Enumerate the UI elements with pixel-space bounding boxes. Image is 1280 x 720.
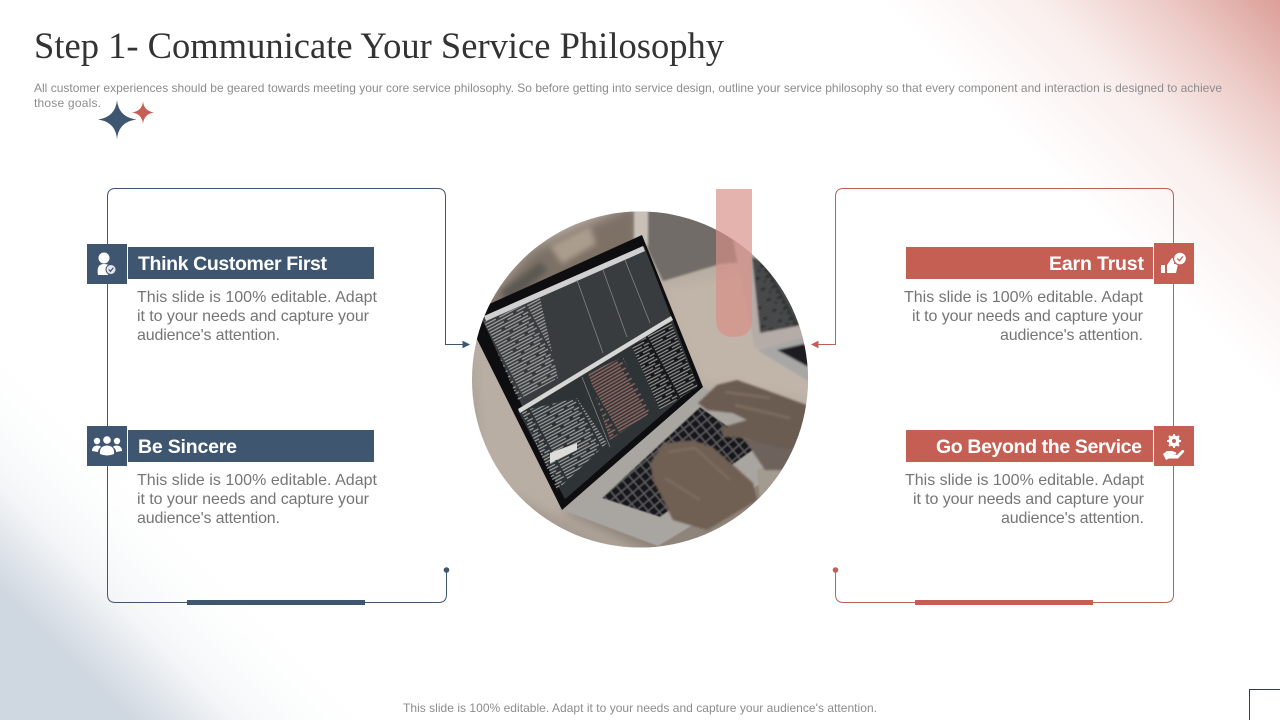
icon: group of people bbox=[87, 426, 127, 466]
photo: laptop on a desk bbox=[472, 212, 808, 548]
icon: thumbs up with check bbox=[1154, 243, 1194, 284]
text block bbox=[137, 289, 378, 344]
laptop screen bbox=[465, 235, 705, 510]
text block: This slide is 100% editable. Adapt bbox=[905, 472, 1145, 489]
panel: Go Beyond the Service bbox=[905, 426, 1194, 527]
icon: person with check bbox=[87, 244, 127, 284]
hands bbox=[650, 380, 812, 530]
heading bar: Be Sincere bbox=[138, 436, 237, 458]
laptop base and keyboard bbox=[562, 387, 812, 546]
text block: This slide is 100% editable. Adapt bbox=[137, 289, 378, 306]
heading bar: Earn Trust bbox=[1049, 253, 1144, 275]
text block: audience's attention. bbox=[1000, 327, 1143, 344]
left frame with arrow bbox=[108, 188, 469, 605]
title: Step 1- Communicate Your Service Philosophy bbox=[34, 25, 725, 66]
heading bar bbox=[128, 430, 374, 462]
panel: Earn Trust bbox=[904, 243, 1194, 344]
icon: hand holding gear bbox=[1154, 426, 1194, 466]
icon: decorative stars bbox=[98, 100, 154, 139]
pink accent bar bbox=[716, 189, 752, 337]
right frame with arrow bbox=[812, 188, 1174, 605]
heading bar: Go Beyond the Service bbox=[936, 436, 1142, 458]
intro text: those goals. bbox=[34, 96, 101, 110]
text block: it to your needs and capture your bbox=[913, 491, 1145, 508]
blurred room and desk bbox=[472, 212, 808, 548]
text block bbox=[905, 472, 1145, 527]
footer note: This slide is 100% editable. Adapt it to your needs and capture your audience's attention. bbox=[403, 701, 877, 715]
intro text: All customer experiences should be geared towards meeting your core service philosophy. So before getting into service design, outline your service philosophy so that every component and interaction is designed to achieve bbox=[34, 81, 1222, 95]
intro text bbox=[34, 81, 1222, 110]
heading bar: Think Customer First bbox=[138, 253, 328, 275]
text block bbox=[904, 289, 1144, 344]
second laptop bbox=[733, 240, 808, 382]
corner square bbox=[1250, 690, 1280, 720]
heading bar bbox=[906, 430, 1153, 462]
text block: it to your needs and capture your bbox=[137, 308, 370, 325]
text block: audience's attention. bbox=[137, 327, 280, 344]
panel: Be Sincere bbox=[87, 426, 378, 527]
text block: it to your needs and capture your bbox=[912, 308, 1144, 325]
text block: audience's attention. bbox=[137, 510, 280, 527]
text block bbox=[137, 472, 378, 527]
text block: it to your needs and capture your bbox=[137, 491, 370, 508]
text block: audience's attention. bbox=[1001, 510, 1144, 527]
text block: This slide is 100% editable. Adapt bbox=[137, 472, 378, 489]
panel: Think Customer First bbox=[87, 244, 378, 344]
heading bar bbox=[906, 247, 1153, 279]
heading bar bbox=[128, 247, 374, 279]
text block: This slide is 100% editable. Adapt bbox=[904, 289, 1144, 306]
